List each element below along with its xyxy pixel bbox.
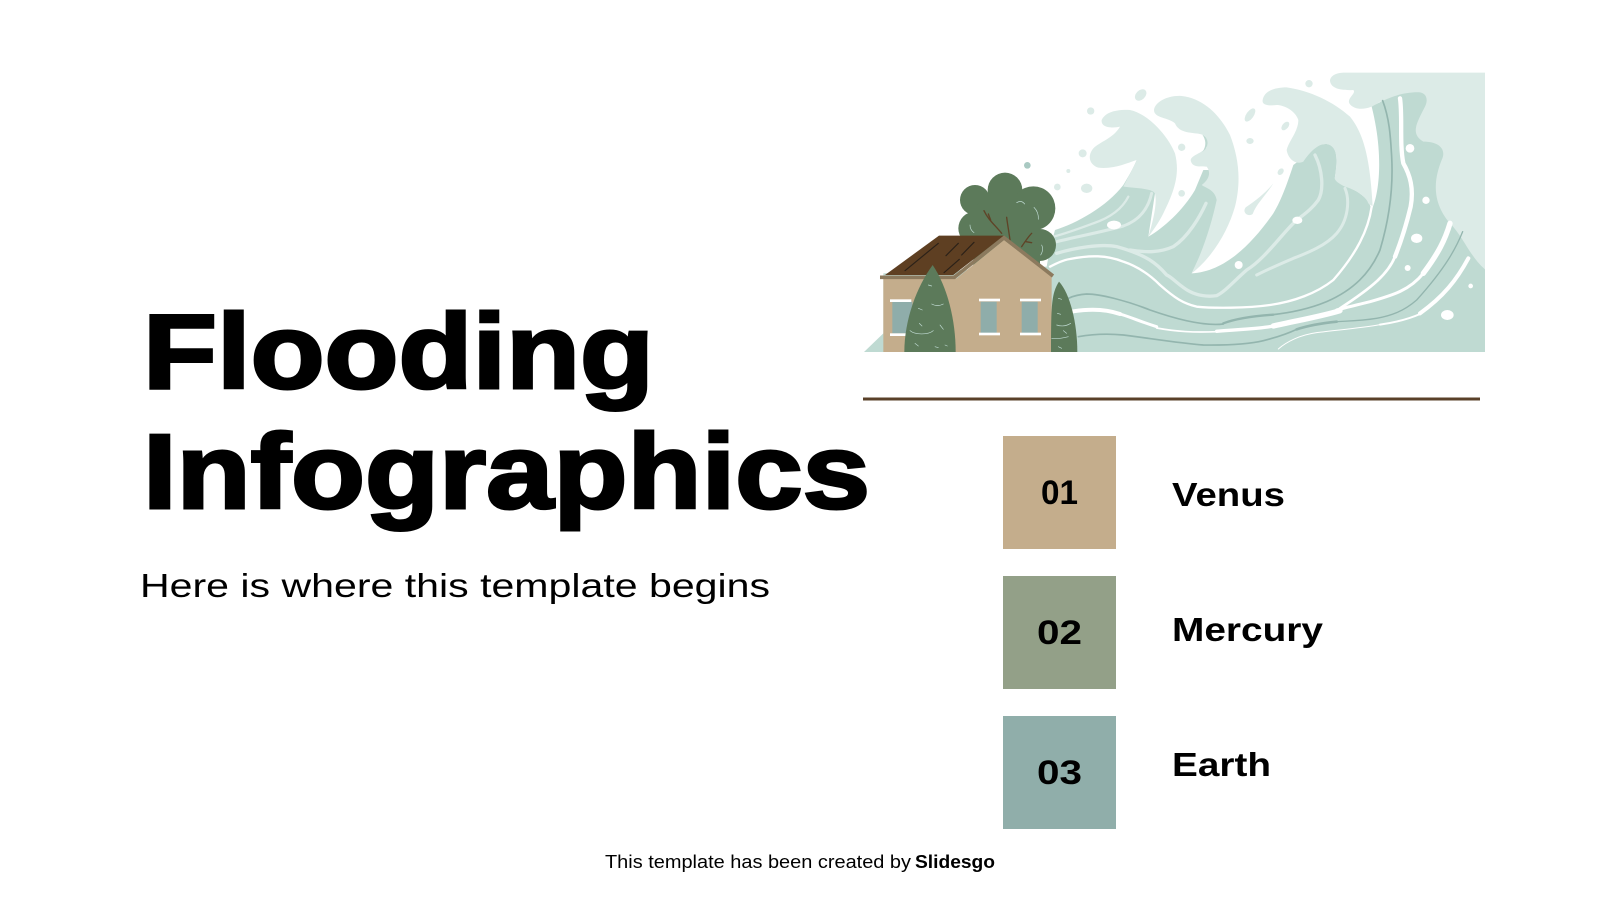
pale wave crest two — [1154, 96, 1239, 273]
title line two: Infographics — [143, 413, 870, 531]
footer credit — [605, 851, 995, 872]
title line one: Flooding — [143, 293, 654, 411]
back pale wave — [1330, 73, 1485, 273]
roof — [885, 236, 1004, 275]
window sills — [890, 299, 1041, 336]
windows — [892, 302, 1038, 333]
divider line — [863, 398, 1480, 400]
item 02: Mercury — [1003, 576, 1324, 689]
front right cypress — [1051, 282, 1077, 352]
dark current lines — [1068, 101, 1463, 345]
item 03: Earth — [1003, 716, 1271, 829]
notch shadow on crest two — [1202, 135, 1208, 152]
tree crown — [958, 173, 1056, 267]
title — [143, 293, 870, 531]
number 01: 01 — [1041, 474, 1078, 512]
white foam dots — [1107, 144, 1473, 320]
house walls — [883, 240, 1052, 352]
credit text: This template has been created by — [605, 851, 912, 872]
pale wave crest one — [1090, 110, 1177, 237]
label Venus: Venus — [1172, 476, 1285, 513]
roof cracks — [905, 242, 974, 273]
main water body — [864, 92, 1485, 352]
white foam ribbons — [1050, 98, 1468, 349]
pale streaks in the water — [1053, 155, 1348, 296]
teal square — [1003, 716, 1116, 829]
number 02: 02 — [1037, 614, 1082, 652]
pale tear splash — [1244, 183, 1273, 215]
item 01: Venus — [1003, 436, 1285, 549]
tree behind house — [958, 173, 1056, 267]
spray droplets — [1054, 80, 1313, 197]
roof eave — [880, 238, 1053, 277]
number 03: 03 — [1037, 754, 1082, 792]
tree branches — [984, 211, 1032, 247]
dark spray droplet — [1024, 162, 1031, 169]
tree highlights — [970, 202, 1043, 255]
olive square — [1003, 576, 1116, 689]
subtitle: Here is where this template begins — [140, 567, 770, 604]
house — [880, 236, 1053, 352]
brand name: Slidesgo — [915, 851, 995, 872]
label Earth: Earth — [1172, 746, 1271, 783]
illustration: house and flood wave — [864, 73, 1485, 352]
front left cypress — [904, 265, 956, 352]
pale wave crest three — [1263, 87, 1373, 207]
tan square — [1003, 436, 1116, 549]
label Mercury: Mercury — [1172, 611, 1324, 648]
